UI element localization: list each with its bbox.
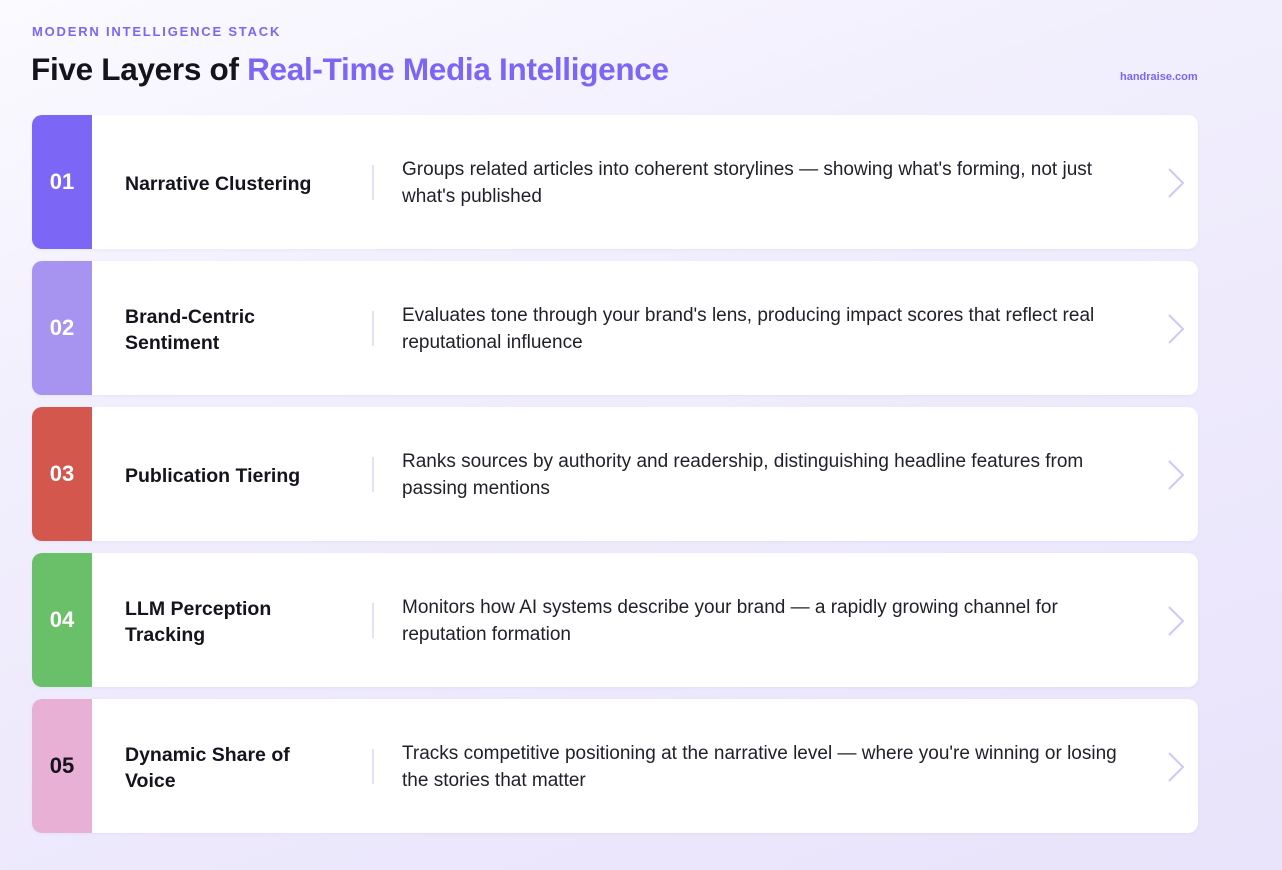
card 05: 05 — [50, 753, 74, 778]
card 05: Voice — [125, 770, 176, 792]
card 01: 01 — [50, 169, 74, 194]
card 04: Monitors how AI systems describe your brand — a rapidly growing channel for reputation formation — [402, 597, 1058, 645]
card 04: 04 — [50, 607, 74, 632]
card 04: Tracking — [125, 624, 205, 646]
card 03: Ranks sources by authority and readership, distinguishing headline features from passing mentions — [402, 451, 1083, 499]
card 02: Sentiment — [125, 332, 219, 354]
card 01 — [32, 115, 1198, 249]
kicker: MODERN INTELLIGENCE STACK — [32, 24, 281, 39]
card 01: Narrative Clustering — [125, 173, 311, 195]
card 03 — [32, 407, 1198, 541]
card 02: Brand-Centric — [125, 306, 255, 328]
card 02 — [32, 261, 1198, 395]
title: Five Layers of Real-Time Media Intelligence — [31, 51, 669, 87]
card 05: Dynamic Share of — [125, 744, 290, 766]
card 02: 02 — [50, 315, 74, 340]
brand: handraise.com — [1120, 71, 1198, 83]
card 04 — [32, 553, 1198, 687]
card 02: Evaluates tone through your brand's lens, producing impact scores that reflect real reputational influence — [402, 305, 1094, 353]
card 05 — [32, 699, 1198, 833]
card 03: 03 — [50, 461, 74, 486]
card 04: LLM Perception — [125, 598, 271, 620]
card 01: Groups related articles into coherent storylines — showing what's forming, not just what's published — [402, 159, 1092, 207]
card 05: Tracks competitive positioning at the narrative level — where you're winning or losing the stories that matter — [402, 743, 1117, 791]
card 03: Publication Tiering — [125, 465, 300, 487]
